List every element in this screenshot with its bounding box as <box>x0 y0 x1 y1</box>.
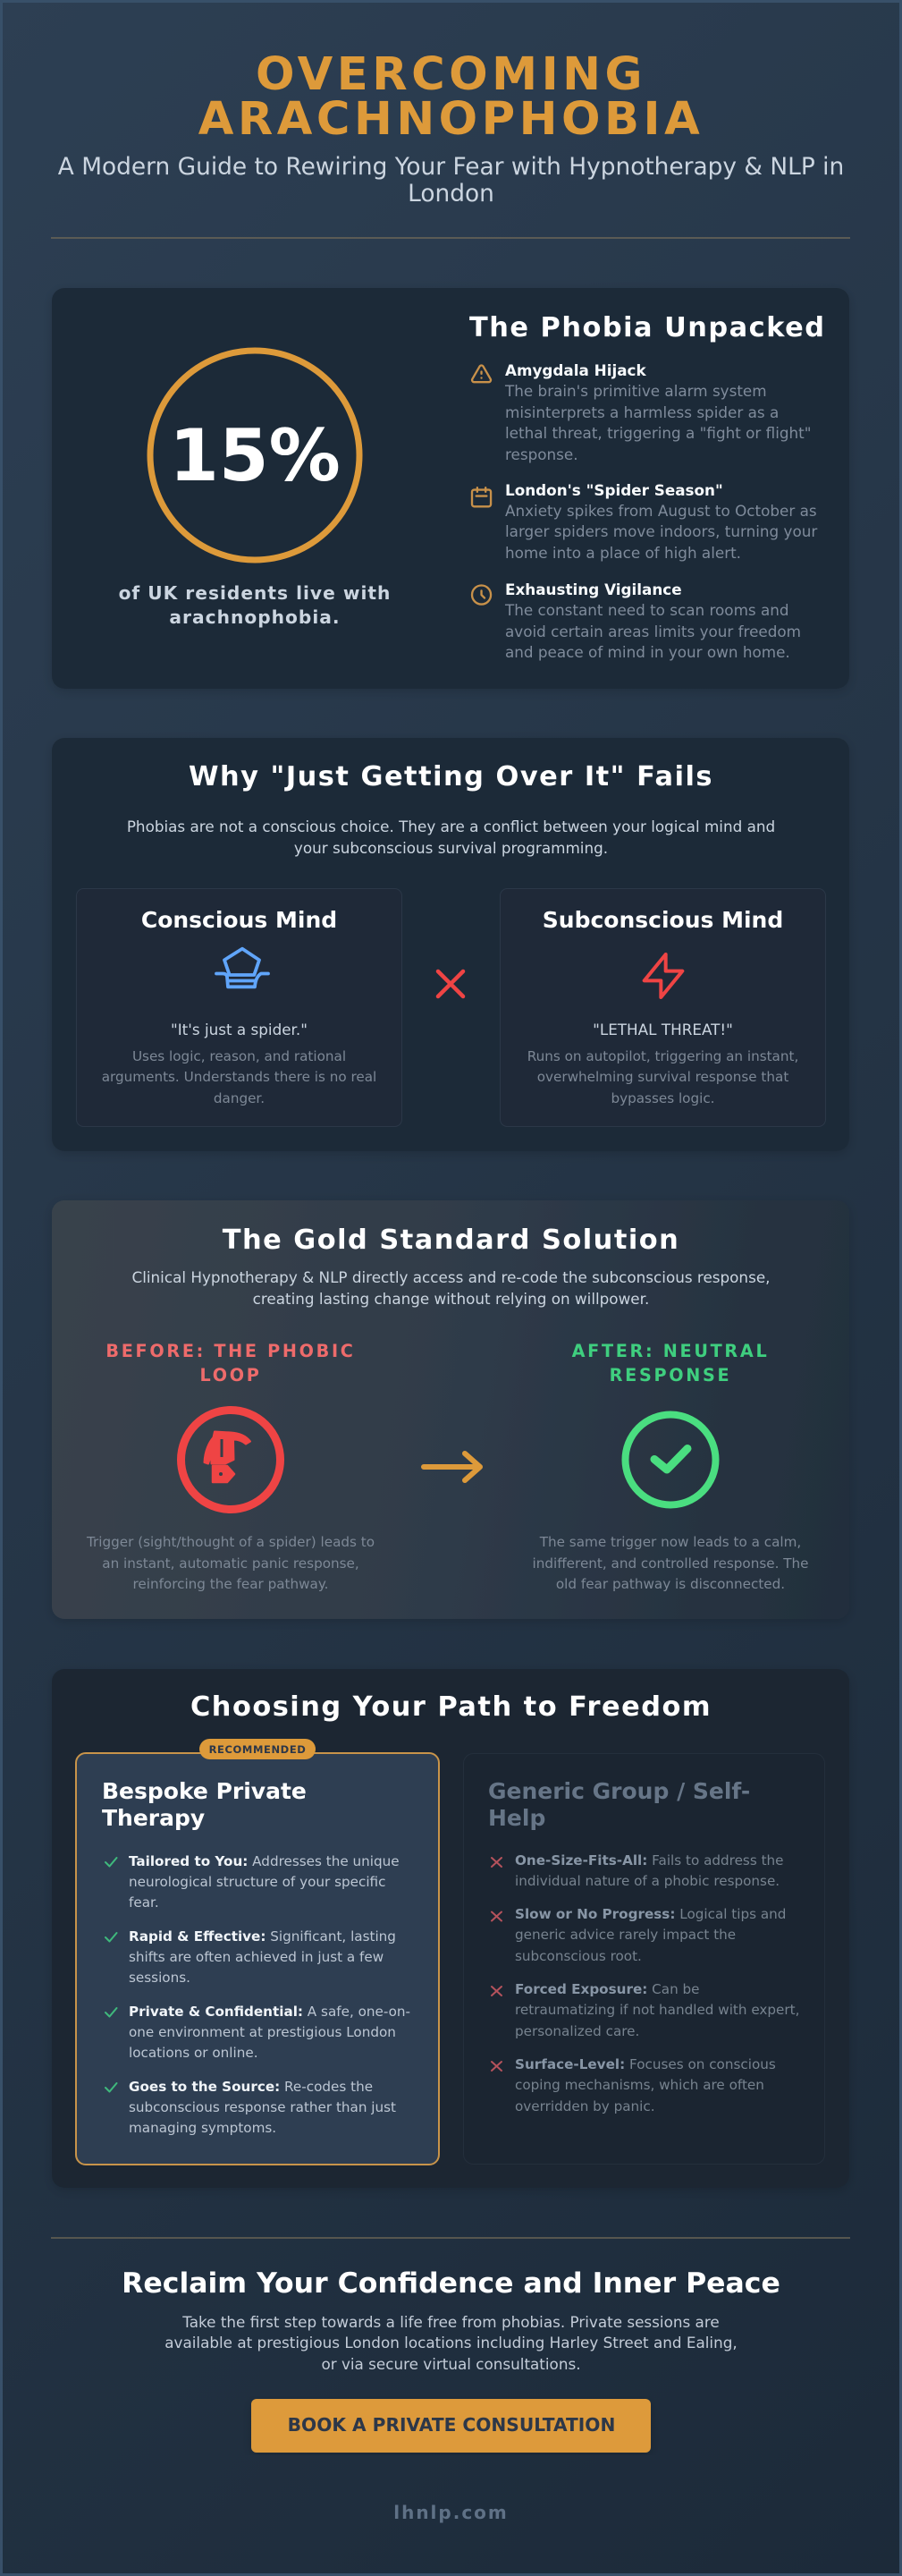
benefit list: managing symptoms. <box>129 2120 276 2136</box>
item: spider season: London's "Spider Season" <box>505 481 723 499</box>
benefit list <box>105 1853 410 2136</box>
footer text: Take the first step towards a life free from phobias. Private sessions are <box>181 2313 720 2331</box>
after state: The same trigger now leads to a calm, <box>539 1534 801 1550</box>
card: subconscious mind <box>501 889 826 1127</box>
icon: clock <box>472 586 491 605</box>
footer call to action <box>122 2267 780 2523</box>
drawback list: Fails to address the <box>652 1852 783 1868</box>
item: spider season <box>472 481 817 562</box>
icon: calendar <box>472 487 491 506</box>
card: bespoke private therapy: Therapy <box>102 1805 205 1831</box>
button: book a private consultation <box>251 2399 651 2453</box>
title: ARACHNOPHOBIA <box>198 92 704 146</box>
card: subconscious mind: Runs on autopilot, triggering an instant, <box>527 1048 798 1064</box>
intro text: creating lasting change without relying on willpower. <box>253 1290 649 1308</box>
drawback list <box>492 1852 799 2114</box>
benefit list: A safe, one-on- <box>308 2004 410 2020</box>
benefit list: shifts are often achieved in just a few <box>129 1949 384 1965</box>
item: amygdala hijack <box>472 361 811 463</box>
panel: choosing your path to freedom <box>52 1669 849 2188</box>
benefit list: Private & Confidential: <box>129 2004 303 2020</box>
benefit list: Goes to the Source: <box>129 2079 280 2095</box>
benefit list: fear. <box>129 1894 159 1911</box>
item: amygdala hijack: lethal threat, triggering a "fight or flight" <box>505 424 811 442</box>
drawback list: One-Size-Fits-All: <box>515 1852 647 1868</box>
drawback list: retraumatizing if not handled with expert, <box>515 2002 799 2018</box>
before state <box>86 1341 375 1592</box>
benefit list: locations or online. <box>129 2045 258 2061</box>
drawback list: personalized care. <box>515 2023 639 2039</box>
icon: panic loop <box>181 1410 281 1510</box>
icon: green check <box>626 1415 715 1504</box>
drawback list: Logical tips and <box>679 1906 786 1922</box>
drawback list: Focuses on conscious <box>629 2056 776 2072</box>
card: conscious mind: Conscious Mind <box>141 907 337 933</box>
card: conscious mind: "It's just a spider." <box>171 1021 308 1038</box>
after state: AFTER: NEUTRAL <box>572 1341 769 1361</box>
heading: The Phobia Unpacked <box>469 312 825 343</box>
item: spider season: home into a place of high alert. <box>505 544 741 562</box>
title: OVERCOMING <box>256 47 646 101</box>
drawback list: coping mechanisms, which are often <box>515 2077 764 2093</box>
badge: recommended <box>199 1739 316 1759</box>
heading: Why "Just Getting Over It" Fails <box>189 761 713 792</box>
before state: reinforcing the fear pathway. <box>132 1576 329 1592</box>
drawback list: individual nature of a phobic response. <box>515 1873 780 1889</box>
drawback list: Surface-Level: <box>515 2056 625 2072</box>
stat caption: arachnophobia. <box>169 606 341 628</box>
header <box>58 47 844 208</box>
panel: the phobia unpacked <box>52 288 849 689</box>
badge: recommended: RECOMMENDED <box>209 1743 306 1756</box>
drawback list: overridden by panic. <box>515 2098 655 2114</box>
item: amygdala hijack: misinterprets a harmless spider as a <box>505 403 779 421</box>
card: generic group or self-help <box>463 1753 824 2165</box>
stat circle <box>150 351 359 560</box>
before state: an instant, automatic panic response, <box>102 1555 359 1572</box>
website link: lhnlp.com <box>393 2502 509 2523</box>
item: amygdala hijack: response. <box>505 445 578 463</box>
stat caption: of UK residents live with <box>119 582 391 604</box>
item: exhausting vigilance: Exhausting Vigilance <box>505 580 682 598</box>
after state: RESPONSE <box>610 1365 731 1385</box>
item: exhausting vigilance: The constant need to scan rooms and <box>504 601 789 619</box>
intro text: Phobias are not a conscious choice. They are a conflict between your logical mind and <box>127 818 775 835</box>
card: subconscious mind: overwhelming survival response that <box>537 1069 788 1085</box>
drawback list: Forced Exposure: <box>515 1981 647 1997</box>
subtitle: London <box>408 180 494 208</box>
card: conscious mind <box>77 889 402 1127</box>
card: subconscious mind: "LETHAL THREAT!" <box>593 1021 733 1038</box>
arrow: before to after <box>424 1453 480 1480</box>
card: subconscious mind: bypasses logic. <box>611 1090 715 1106</box>
icon: warning triangle <box>472 366 491 382</box>
icon: lightning bolt <box>645 954 682 997</box>
icon: conflict cross <box>438 971 463 996</box>
subtitle: A Modern Guide to Rewiring Your Fear with Hypnotherapy & NLP in <box>58 153 844 181</box>
intro text: Clinical Hypnotherapy & NLP directly access and re-code the subconscious response, <box>132 1268 770 1286</box>
button: book a private consultation: BOOK A PRIVATE CONSULTATION <box>288 2414 615 2436</box>
item: exhausting vigilance: and peace of mind in your own home. <box>505 643 790 661</box>
footer heading: Reclaim Your Confidence and Inner Peace <box>122 2267 780 2300</box>
drawback list: Can be <box>652 1981 700 1997</box>
drawback list: generic advice rarely impact the <box>515 1927 736 1943</box>
before state: BEFORE: THE PHOBIC <box>105 1341 356 1361</box>
icon: blue mind <box>216 949 268 987</box>
card: bespoke private therapy: Bespoke Private <box>102 1778 307 1804</box>
item: amygdala hijack: The brain's primitive alarm system <box>504 382 767 400</box>
footer text: available at prestigious London locations including Harley Street and Ealing, <box>164 2334 738 2351</box>
heading: Choosing Your Path to Freedom <box>190 1691 712 1723</box>
card: bespoke private therapy <box>76 1739 439 2165</box>
stat circle: 15% <box>169 414 341 497</box>
panel: why just getting over it fails <box>52 738 849 1151</box>
benefit list: sessions. <box>129 1970 190 1986</box>
benefit list: Addresses the unique <box>252 1853 400 1869</box>
card: subconscious mind: Subconscious Mind <box>543 907 783 933</box>
benefit list: subconscious response rather than just <box>129 2099 396 2115</box>
benefit list: Tailored to You: <box>129 1853 248 1869</box>
drawback list: subconscious root. <box>515 1948 642 1964</box>
heading: The Gold Standard Solution <box>223 1224 679 1256</box>
card: generic group or self-help: Generic Group / Self- <box>488 1778 750 1804</box>
footer text: or via secure virtual consultations. <box>321 2355 581 2373</box>
drawback list: Slow or No Progress: <box>515 1906 675 1922</box>
card: conscious mind: arguments. Understands there is no real <box>102 1069 376 1085</box>
benefit list: one environment at prestigious London <box>129 2024 396 2040</box>
benefit list: Re-codes the <box>284 2079 373 2095</box>
benefit list: neurological structure of your specific <box>129 1874 385 1890</box>
before state: LOOP <box>199 1365 262 1385</box>
card: generic group or self-help: Help <box>488 1805 545 1831</box>
item: amygdala hijack: Amygdala Hijack <box>505 361 647 379</box>
intro text: your subconscious survival programming. <box>294 839 608 857</box>
item: exhausting vigilance <box>472 580 801 661</box>
after state <box>533 1341 808 1592</box>
card: conscious mind: Uses logic, reason, and rational <box>132 1048 346 1064</box>
before state: Trigger (sight/thought of a spider) leads to <box>86 1534 375 1550</box>
benefit list: Significant, lasting <box>270 1928 396 1945</box>
item: spider season: larger spiders move indoors, turning your <box>505 522 817 540</box>
after state: old fear pathway is disconnected. <box>556 1576 785 1592</box>
card: conscious mind: danger. <box>214 1090 265 1106</box>
item: exhausting vigilance: avoid certain areas limits your freedom <box>505 623 801 640</box>
benefit list: Rapid & Effective: <box>129 1928 266 1945</box>
item: spider season: Anxiety spikes from August to October as <box>505 502 817 520</box>
panel: the gold standard solution <box>52 1200 849 1619</box>
after state: indifferent, and controlled response. The <box>533 1555 808 1572</box>
